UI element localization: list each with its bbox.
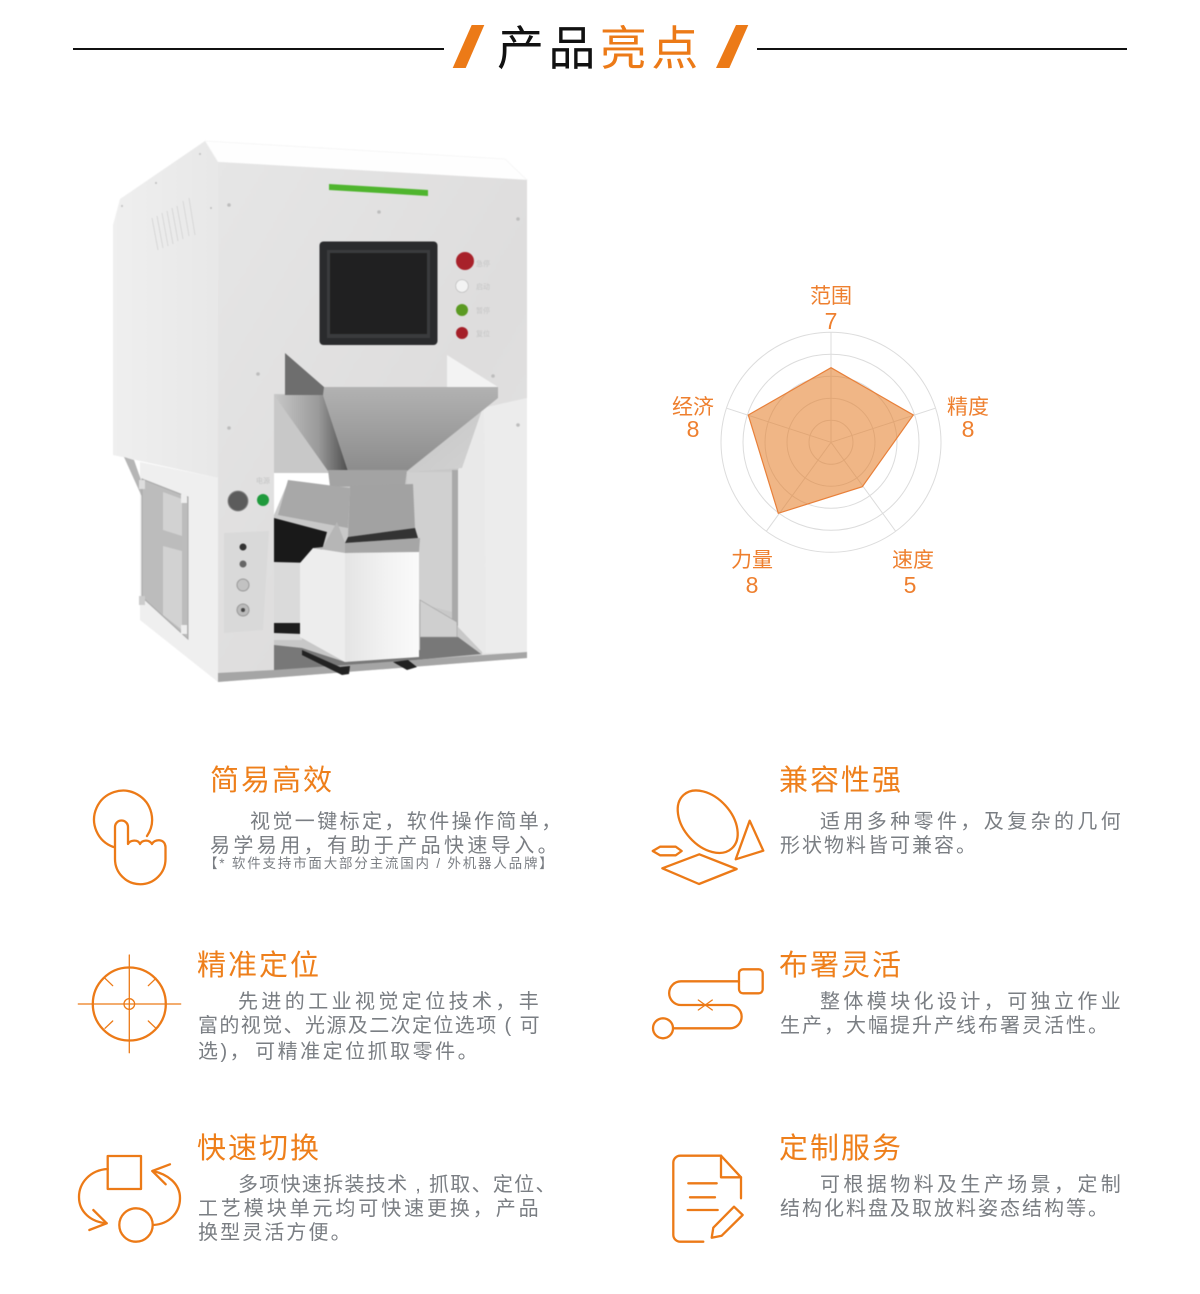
axis label: precision: 8: [962, 416, 974, 442]
description: 易学易用，有助于产品快速导入。: [210, 835, 561, 857]
feature: strong compatibility: [652, 765, 1124, 886]
floor rails: [302, 650, 417, 675]
feature: flexible deployment: [652, 950, 1124, 1040]
axis label: range: 7: [825, 308, 837, 334]
description: 富的视觉、光源及二次定位选项 ( 可: [198, 1015, 541, 1037]
axis label: economy: 经济: [672, 396, 714, 419]
lower left interior: [274, 562, 302, 640]
description: 工艺模块单元均可快速更换，产品: [198, 1198, 542, 1220]
heading: 精准定位: [197, 950, 321, 982]
description: 选)，可精准定位抓取零件。: [198, 1041, 480, 1063]
description: [780, 1174, 1124, 1220]
axis label: range: [810, 285, 852, 334]
title text: 产品亮点: [497, 22, 703, 75]
icon: swap cycle: [78, 1154, 182, 1243]
description: 生产，大幅提升产线布署灵活性。: [780, 1015, 1110, 1037]
side window: [139, 479, 188, 639]
feature: precise positioning: [78, 950, 542, 1063]
machine front panel: [218, 162, 527, 682]
description: 结构化料盘及取放料姿态结构等。: [780, 1198, 1110, 1220]
axis label: force: 8: [746, 572, 758, 598]
white gap: [274, 473, 330, 515]
heading: 兼容性强: [779, 765, 903, 797]
icon: crosshair target: [78, 954, 182, 1054]
right pillar: [458, 398, 527, 653]
icon: pointing hand: [92, 789, 167, 886]
machine lower side panel: [140, 462, 218, 682]
product machine illustration: [113, 141, 528, 682]
heading: 定制服务: [779, 1133, 903, 1165]
axis label: speed: [892, 549, 934, 598]
axis label: precision: 精度: [947, 396, 989, 419]
title rules and slashes: [73, 25, 1127, 68]
axis label: speed: 5: [904, 572, 916, 598]
touch screen: [320, 242, 438, 345]
description: [198, 991, 542, 1063]
panel screws: [121, 153, 520, 430]
hopper flanks: [274, 395, 498, 472]
title banner: [73, 22, 1127, 75]
heading: 快速切换: [197, 1133, 321, 1165]
hopper neck: [328, 470, 407, 487]
description: 适用多种零件，及复杂的几何: [820, 811, 1124, 833]
description: 先进的工业视觉定位技术，丰: [238, 991, 542, 1013]
axis label: speed: 速度: [892, 549, 934, 572]
axis label: economy: 8: [687, 416, 699, 442]
back wall right: [407, 472, 452, 612]
description: 视觉一键标定，软件操作简单，: [250, 811, 564, 833]
machine floor: [274, 637, 481, 673]
axis label: economy: [672, 396, 714, 442]
right tray: [420, 600, 457, 637]
control buttons: 急停: [476, 259, 490, 268]
radar chart: [720, 332, 942, 553]
machine upper side panel: [113, 141, 218, 478]
icon: document and pencil: [672, 1154, 744, 1243]
axis label: force: [731, 549, 773, 598]
heading: 简易高效: [210, 765, 334, 797]
axis label: range: 范围: [810, 285, 852, 308]
black tray: [274, 518, 327, 563]
machine lid: [205, 141, 527, 180]
description: [198, 1174, 557, 1244]
description: 多项快速拆装技术 , 抓取、定位、: [238, 1174, 557, 1196]
side bracket: [124, 457, 142, 497]
description: 形状物料皆可兼容。: [780, 835, 978, 857]
axis label: force: 力量: [731, 549, 773, 572]
description: [204, 811, 564, 871]
connector recess: [224, 531, 269, 633]
heading: 布署灵活: [779, 950, 903, 982]
feature: custom service: [672, 1133, 1124, 1243]
description: 【* 软件支持市面大部分主流国内 / 外机器人品牌】: [204, 856, 555, 871]
radar chart panel: [672, 285, 989, 598]
control buttons: 暂停: [476, 306, 490, 315]
control buttons: 启动: [476, 282, 490, 291]
description: 整体模块化设计，可独立作业: [820, 991, 1124, 1013]
feature: quick changeover: [78, 1133, 557, 1244]
status light bar: [329, 184, 428, 196]
description: 换型灵活方便。: [198, 1222, 353, 1244]
description: 可根据物料及生产场景，定制: [820, 1174, 1124, 1196]
icon: assorted shapes: [652, 789, 764, 886]
icon: route path: [652, 968, 764, 1040]
side vents: [152, 198, 195, 250]
description: [780, 991, 1124, 1037]
feature: easy and efficient: [92, 765, 564, 886]
collection box: [300, 522, 420, 662]
power switch and lamp: [228, 476, 270, 511]
opening back wall: [274, 394, 482, 675]
machine base strip: [218, 652, 527, 682]
hopper funnel: [323, 387, 498, 471]
axis label: precision: [947, 396, 989, 442]
control buttons: [456, 252, 490, 339]
hopper rear plates: [285, 353, 498, 396]
control buttons: 复位: [476, 329, 490, 338]
description: [780, 811, 1124, 857]
power switch and lamp: 电源: [256, 476, 270, 485]
chute block: [278, 480, 415, 537]
